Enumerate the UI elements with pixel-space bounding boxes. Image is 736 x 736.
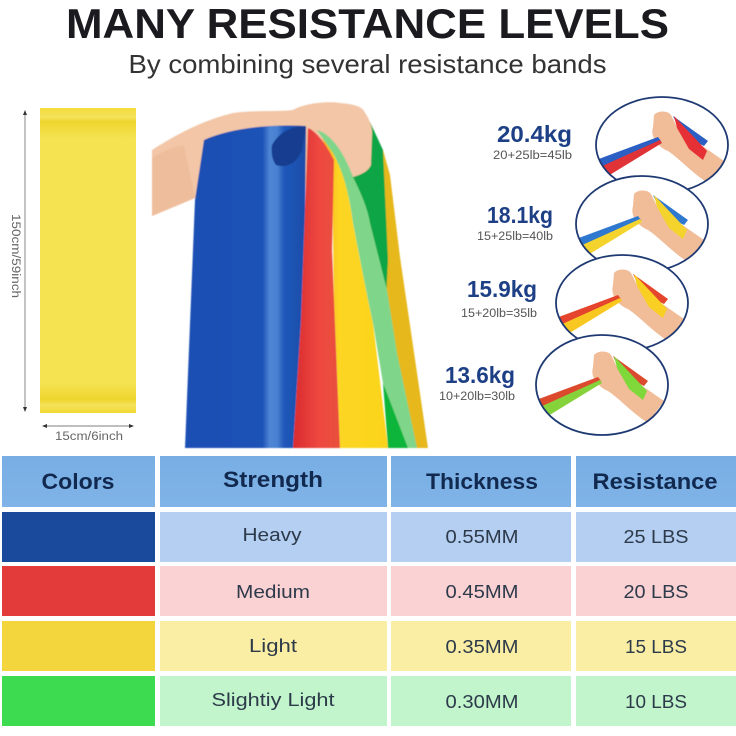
lower green band (383, 383, 408, 448)
row: slightly light (2, 676, 736, 726)
row: medium: Medium (236, 582, 310, 602)
table (2, 456, 736, 726)
combo 15.9kg (461, 255, 688, 351)
yellow band (322, 138, 388, 448)
subtitle: By combining several resistance bands (128, 49, 606, 79)
flat band (40, 108, 136, 413)
row: light: Light (249, 636, 297, 656)
circle: red and green (536, 335, 668, 435)
combo 18.1kg (477, 176, 708, 272)
circle: blue and red (596, 97, 728, 193)
row: medium: 20 LBS (624, 582, 688, 602)
row: heavy: Heavy (242, 525, 302, 545)
table header: Resistance (592, 469, 718, 494)
row: heavy: 25 LBS (624, 527, 688, 547)
weight: 13.6kg (445, 362, 515, 388)
table header: Strength (223, 467, 323, 492)
red band (293, 128, 340, 448)
width arrow (42, 424, 134, 428)
table header: Thickness (426, 469, 538, 494)
photo: hand holding bands (152, 102, 428, 448)
circle: blue and yellow (576, 176, 708, 272)
title: MANY RESISTANCE LEVELS (66, 0, 669, 47)
row: slightly light: 0.30MM (446, 692, 518, 712)
row: medium (2, 566, 736, 616)
row: heavy: 0.55MM (446, 527, 518, 547)
row: slightly light: 10 LBS (625, 692, 687, 712)
arm shadow (152, 146, 195, 216)
row: slightly light: Slightiy Light (212, 690, 334, 710)
formula: 15+25lb=40lb (477, 231, 553, 243)
weight: 18.1kg (487, 202, 553, 228)
weight: 20.4kg (497, 121, 572, 147)
combo 20.4kg (493, 97, 728, 193)
flat yellow band with dimensions (9, 108, 136, 443)
combo 13.6kg (439, 335, 668, 435)
rear yellow band (370, 150, 428, 448)
width label: 15cm/6inch (55, 431, 123, 443)
height label: 150cm/59inch (9, 214, 21, 298)
row: heavy (2, 512, 736, 562)
blue band fold (272, 127, 306, 166)
row: light: 15 LBS (625, 637, 687, 657)
height arrow (23, 110, 27, 412)
panel: band combinations (439, 97, 728, 435)
formula: 15+20lb=35lb (461, 308, 537, 320)
rear green band (350, 122, 388, 300)
row: light (2, 621, 736, 671)
row: light: 0.35MM (446, 637, 518, 657)
weight: 15.9kg (467, 276, 537, 302)
arm and hand (152, 102, 372, 216)
table header: Colors (42, 469, 114, 494)
light green band (317, 130, 417, 448)
circle: red and yellow (556, 255, 688, 351)
blue band (185, 126, 306, 448)
formula: 10+20lb=30lb (439, 391, 515, 403)
formula: 20+25lb=45lb (493, 150, 572, 162)
table header (2, 456, 736, 507)
row: medium: 0.45MM (446, 582, 518, 602)
